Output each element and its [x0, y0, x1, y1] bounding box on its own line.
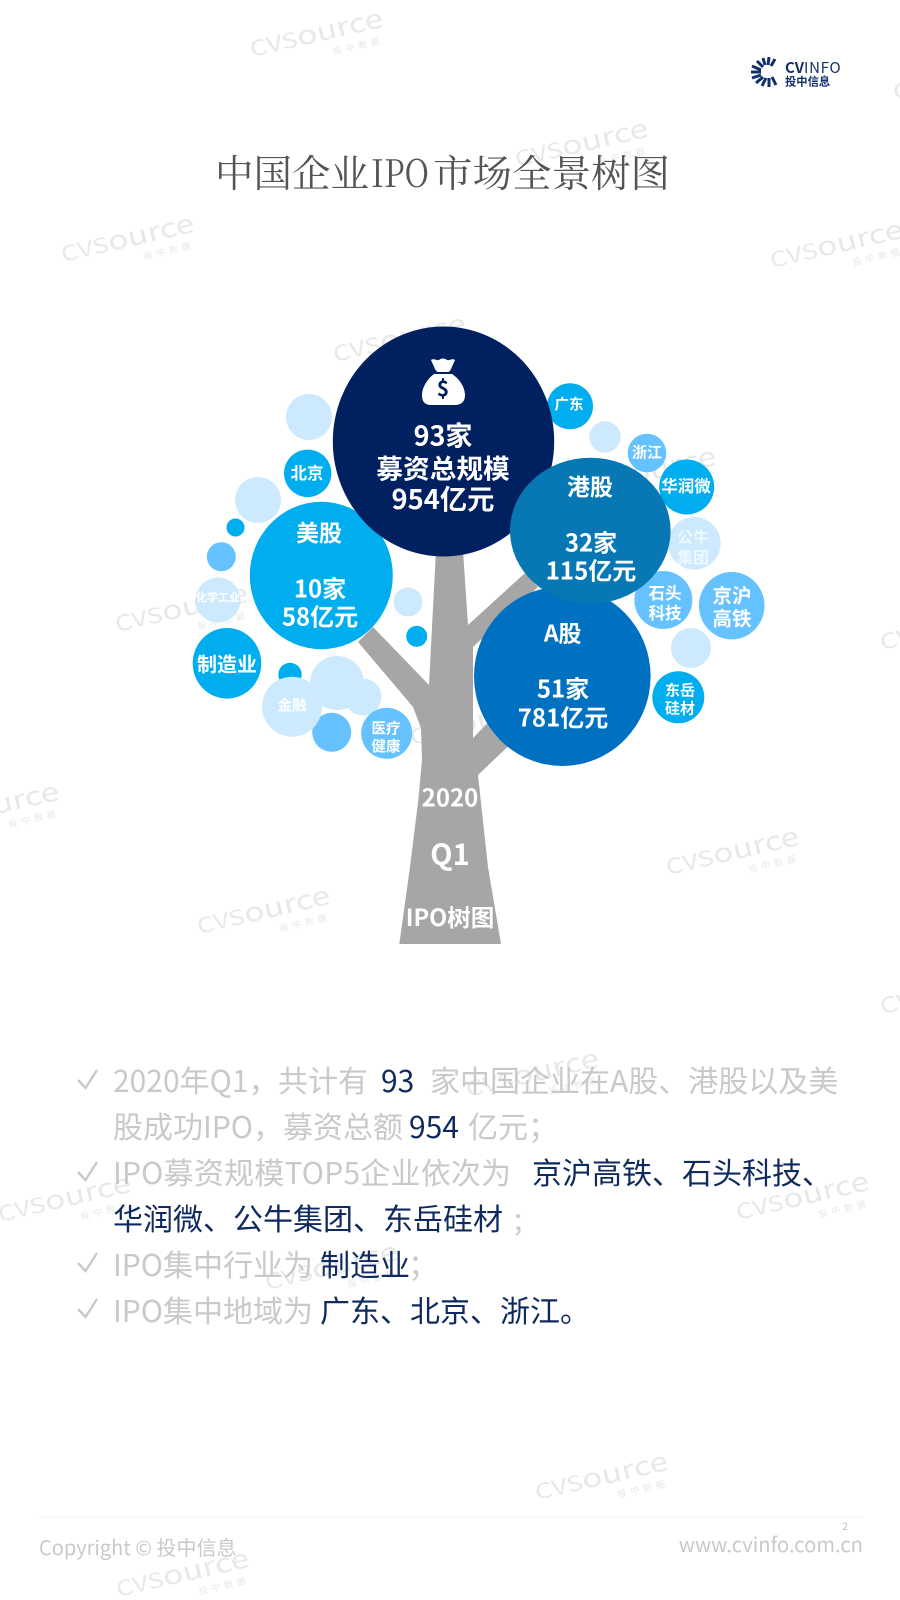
- watermarks: 投中数据: [346, 1266, 400, 1291]
- logo chinese name: 投中信息: [785, 74, 830, 90]
- watermarks: 投中数据: [817, 1196, 871, 1221]
- bubble: 北京: [284, 450, 331, 497]
- bubble: 石头科技: 科技: [648, 600, 682, 624]
- bullet 3: [78, 1241, 438, 1285]
- bubble: 金融: 金融: [278, 694, 307, 715]
- title: 中国企业: [215, 143, 369, 198]
- bullet 1: 股成功IPO，募资总额: [113, 1103, 403, 1147]
- title: IPO: [371, 143, 429, 198]
- copyright: Copyright © 投中信息: [39, 1532, 236, 1561]
- bubble: 美股: 58亿元: [282, 597, 358, 632]
- bubble: 金融: [262, 677, 322, 737]
- watermarks: 投中数据: [142, 238, 196, 263]
- watermarks: CVSource: [510, 108, 651, 175]
- bubble: 北京: 北京: [290, 460, 324, 484]
- bubble: 京沪高铁: 高铁: [712, 602, 752, 631]
- bubble: 京沪高铁: [699, 572, 764, 639]
- bullet 1: 954: [409, 1103, 459, 1147]
- tree trunk and branches: [358, 550, 538, 944]
- watermarks: CVSource: [578, 436, 719, 503]
- trunk label: 2020: 2020: [422, 778, 478, 814]
- watermarks: CVSource: [56, 203, 197, 270]
- bubble: A股: 51家: [537, 669, 589, 704]
- bullet 1: 家中国企业在A股、港股以及美: [430, 1057, 838, 1101]
- watermarks: 投中数据: [7, 806, 61, 831]
- bubble: 港股: [510, 458, 671, 604]
- bullet 2: ;: [514, 1195, 522, 1239]
- bullet 3: ；: [408, 1241, 438, 1285]
- bullet 4: [78, 1287, 590, 1331]
- bubble: A股: 781亿元: [518, 698, 608, 733]
- watermarks: 投中数据: [196, 608, 250, 633]
- bubble: 公牛集团: 集团: [677, 544, 709, 568]
- bubble: total raised: 募资总规模: [376, 447, 510, 486]
- bullet 3: IPO集中行业为: [113, 1241, 313, 1285]
- bullet 1: 亿元；: [468, 1103, 558, 1147]
- watermarks: CVSource: [405, 686, 546, 753]
- logo: CVINFO: [751, 57, 841, 90]
- bubble: 公牛集团: 公牛: [677, 524, 709, 548]
- icon: money bag: [422, 358, 465, 405]
- bubble: 港股: 32家: [565, 523, 617, 558]
- bullet 4: 广东、北京、浙江。: [320, 1287, 590, 1331]
- bullet 1: 共计有: [278, 1057, 368, 1101]
- bubble: 制造业: [193, 628, 261, 699]
- trunk label: Q1: Q1: [430, 832, 470, 874]
- bubble: 美股: 10家: [294, 569, 346, 604]
- decorative mid-blue bubbles: [207, 542, 351, 752]
- footer: [38, 1517, 863, 1561]
- bubble: total raised: 93家: [414, 414, 472, 453]
- bubble: 化学工业: [196, 578, 240, 622]
- watermarks: 投中数据: [547, 1073, 601, 1098]
- bubble: 公牛集团: [668, 517, 721, 570]
- watermarks: CVSource: [328, 303, 469, 370]
- bullet 1: 2020年Q1，: [113, 1057, 279, 1101]
- decorative blue bubbles: [226, 518, 427, 686]
- decorative pale bubbles: [235, 394, 711, 716]
- title: 市场全景树图: [433, 143, 670, 198]
- bubble: 广东: [547, 383, 593, 429]
- website: www.cvinfo.com.cn: [679, 1529, 863, 1558]
- bubble: 东岳硅材: 硅材: [665, 697, 695, 718]
- watermarks: 投中数据: [616, 1476, 670, 1501]
- logo wordmark: CVINFO: [785, 57, 841, 78]
- trunk label: IPO tree: IPO树图: [406, 899, 494, 933]
- bubble: 美股: [250, 502, 393, 649]
- bullet 1: 93: [381, 1057, 414, 1101]
- bubble: 华润微: 华润微: [661, 473, 711, 497]
- icon: logo rays: [751, 57, 776, 87]
- bubble: 医疗健康: 医疗: [372, 717, 400, 738]
- bubble: 石头科技: 石头: [648, 580, 682, 604]
- bullet 4: IPO集中地域为: [113, 1287, 313, 1331]
- bullet 2: 京沪高铁、石头科技、: [532, 1149, 832, 1193]
- watermarks: CVSource: [765, 209, 900, 276]
- bubble: 港股: 115亿元: [546, 551, 636, 586]
- icon: money bag: $: [437, 373, 449, 403]
- tree graphic: [193, 326, 764, 944]
- bubble: 东岳硅材: 东岳: [665, 679, 695, 700]
- bubble: total raised: [333, 326, 554, 556]
- watermarks: CVSource: [260, 1231, 401, 1298]
- bubble: 广东: 广东: [554, 393, 584, 414]
- watermarks: 投中数据: [331, 33, 385, 58]
- bubble: 美股: 美股: [296, 514, 342, 548]
- bubble: A股: A股: [543, 615, 582, 649]
- bubble: 港股: 港股: [567, 468, 613, 502]
- watermarks: CVSource: [192, 875, 333, 942]
- bubble: 浙江: [628, 434, 666, 472]
- watermarks: CVSource: [110, 573, 251, 640]
- bubble: 制造业: 制造业: [197, 648, 257, 677]
- watermarks: 投中数据: [79, 1198, 133, 1223]
- title: [215, 143, 670, 198]
- watermarks: CVSource: [530, 1441, 671, 1508]
- watermarks: 投中数据: [747, 851, 801, 876]
- bullet 3: 制造业: [320, 1241, 410, 1285]
- watermarks: 投中数据: [664, 471, 718, 496]
- bullet 2: IPO募资规模TOP5企业依次为: [113, 1149, 511, 1193]
- bubble: 东岳硅材: [652, 671, 704, 723]
- bubble: 华润微: [659, 460, 714, 514]
- watermarks: CVSource: [245, 0, 386, 65]
- bubble: 京沪高铁: 京沪: [712, 579, 752, 608]
- bullet 2: 华润微、公牛集团、东岳硅材: [113, 1195, 503, 1239]
- bubble: 化学工业: 化学工业: [196, 589, 240, 605]
- watermarks: 投中数据: [197, 1573, 251, 1598]
- page number: 2: [842, 1518, 848, 1533]
- bubble: A股: [474, 587, 651, 766]
- bubble: 浙江: 浙江: [632, 441, 662, 462]
- bubble: 医疗健康: 健康: [372, 735, 401, 756]
- bullet 1: [78, 1057, 838, 1147]
- watermarks: 投中数据: [596, 143, 650, 168]
- watermarks: CVSource: [461, 1038, 602, 1105]
- watermarks: 投中数据: [278, 910, 332, 935]
- bubble: total raised: 954亿元: [392, 477, 494, 517]
- summary bullets: [78, 1057, 838, 1331]
- bubble: 石头科技: [634, 571, 692, 629]
- bubble: 医疗健康: [361, 708, 412, 759]
- watermarks: CVSource: [731, 1161, 872, 1228]
- watermarks: CVSource: [661, 816, 802, 883]
- bullet 2: [78, 1149, 832, 1239]
